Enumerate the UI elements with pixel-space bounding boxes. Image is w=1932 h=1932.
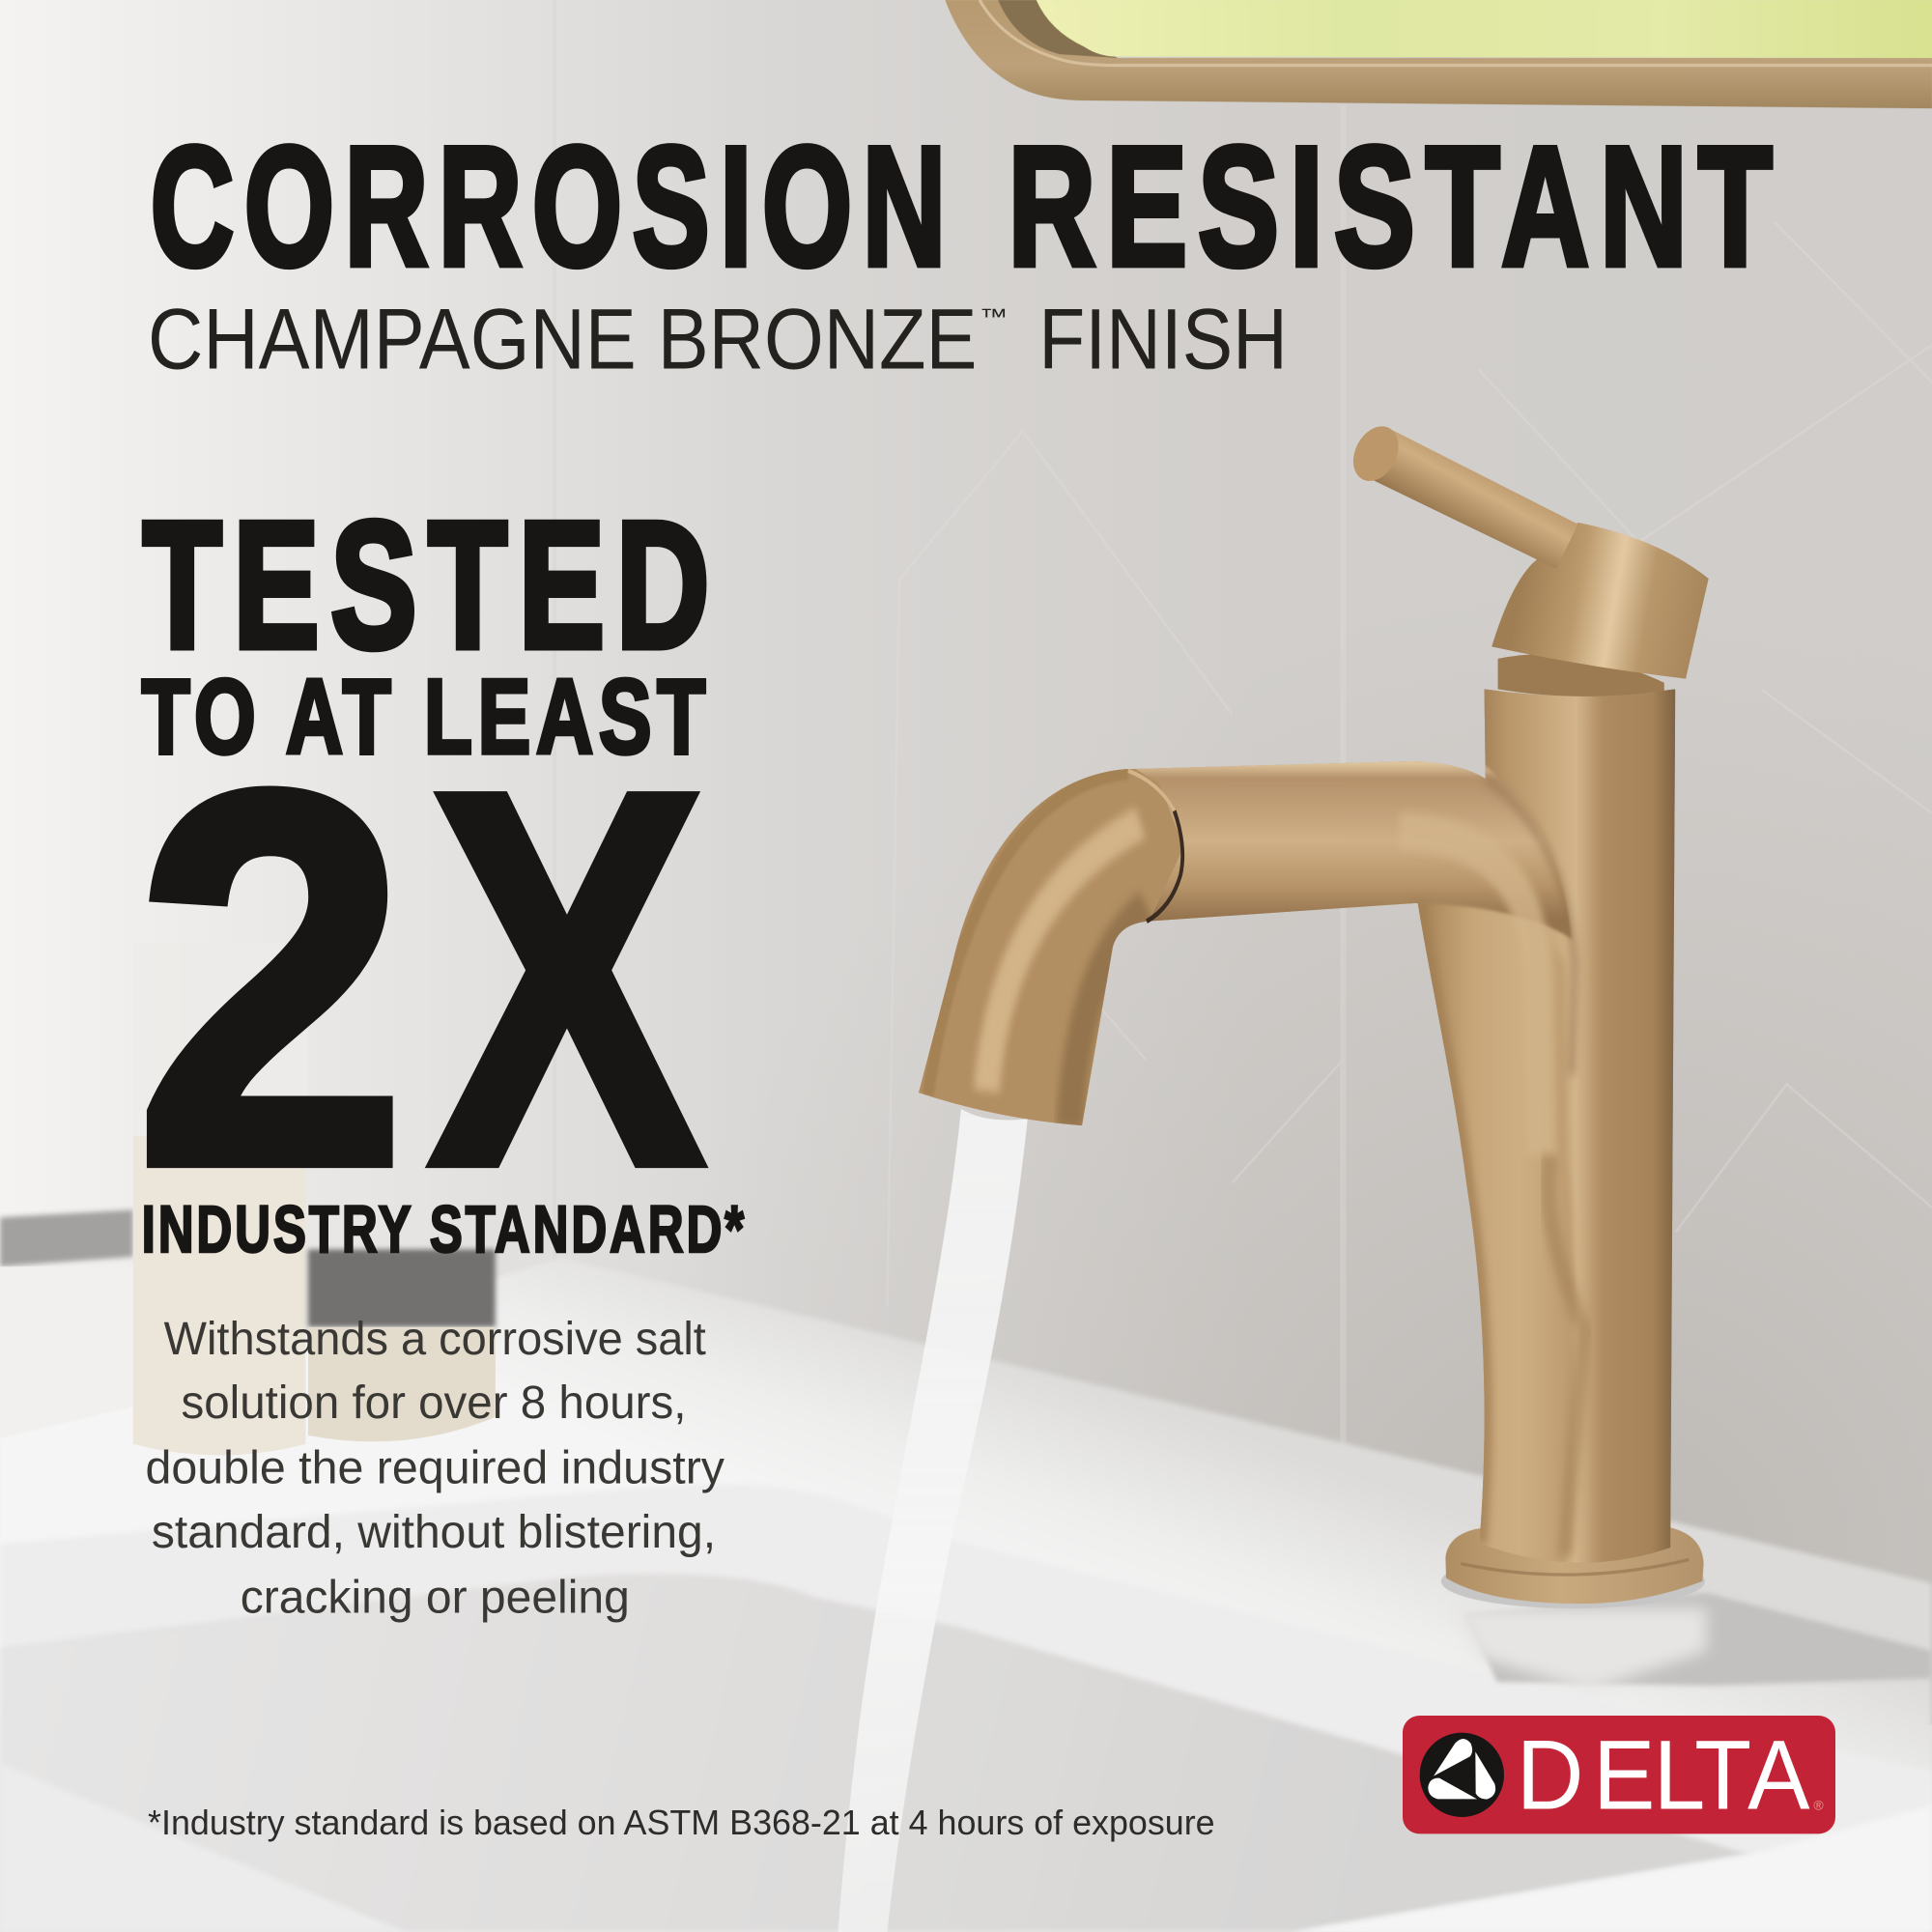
- ledge behind at left: [0, 1210, 133, 1266]
- jar body: [308, 1327, 496, 1441]
- faucet shadow on counter: [1466, 1593, 1932, 1686]
- trademark: ™: [980, 303, 1008, 328]
- logo black circle emblem: [1420, 1733, 1504, 1817]
- faucet base plate: [1441, 1527, 1705, 1608]
- blurred jar: [308, 1249, 496, 1441]
- mirror frame: [945, 0, 1932, 108]
- shoulder highlight: [1400, 831, 1541, 1155]
- elbow inner shadow: [1069, 907, 1147, 1127]
- shoulder edge: [1486, 779, 1575, 1075]
- handle lever: [1345, 415, 1577, 569]
- heading: corrosion resistant: [151, 112, 1783, 301]
- near rim at lower left: [0, 1763, 407, 1932]
- mirror glass: [1037, 0, 1932, 58]
- registered mark: ®: [1813, 1797, 1824, 1812]
- faucet lower body: [1406, 883, 1576, 1572]
- gasket: [1441, 1554, 1705, 1608]
- blurred bottle: [133, 943, 308, 1455]
- wall lower shading: [493, 493, 1932, 1725]
- elbow highlight: [986, 823, 1141, 1092]
- sink bowl: [0, 1574, 1749, 1932]
- sink rim bevel: [0, 1485, 1932, 1932]
- faucet column: [1485, 683, 1677, 1572]
- champagne bronze: CHAMPAGNE BRONZE: [148, 290, 977, 386]
- jar lid: [308, 1249, 496, 1327]
- spout ring upper: [1128, 771, 1175, 810]
- towel: [0, 1266, 133, 1438]
- bottle upper: [133, 943, 308, 1140]
- elbow outer edge: [928, 773, 1128, 1095]
- handle hub: [1492, 523, 1709, 679]
- plate: [1445, 1527, 1704, 1604]
- faucet reflection: [1454, 1608, 1707, 1690]
- plate groove: [1461, 1559, 1689, 1575]
- big claim block: [135, 485, 747, 1275]
- letter X: X: [430, 683, 705, 1275]
- brushed metal shading: [906, 683, 1677, 1572]
- tested: TESTED: [143, 485, 721, 686]
- emblem circle: [1420, 1733, 1504, 1817]
- spout elbow and outlet: [919, 769, 1180, 1126]
- body copy: cracking or peeling: [241, 1572, 630, 1624]
- body copy: double the required industry: [146, 1442, 725, 1494]
- body copy: [146, 1313, 725, 1624]
- counter top: [0, 1258, 1932, 1932]
- Delta logo: [1403, 1716, 1835, 1833]
- lower body left edge: [1418, 903, 1485, 1544]
- subheading: champagne bronze finish: [148, 290, 1288, 386]
- digit 2: 2: [135, 683, 407, 1275]
- lever end cap: [1345, 415, 1406, 493]
- neck under hub: [1498, 654, 1664, 696]
- logo wordmark: DELTA: [1517, 1720, 1810, 1831]
- tile seams and chevron pattern: [554, 0, 1932, 1466]
- right rim corner: [1293, 1805, 1932, 1932]
- footnote: *Industry standard is based on ASTM B368-21 at 4 hours of exposure: [148, 1804, 1215, 1842]
- faucet silhouette: [919, 689, 1675, 1563]
- finish: FINISH: [1038, 290, 1288, 386]
- word: corrosion: CORROSION: [151, 112, 956, 301]
- emblem teardrops: [1428, 1739, 1495, 1799]
- spout horizontal arm: [1136, 761, 1573, 939]
- 2X: [135, 683, 705, 1275]
- mirror inner channel: [998, 0, 1118, 58]
- industry standard: INDUSTRY STANDARD*: [142, 1192, 747, 1266]
- mirror: [945, 0, 1932, 108]
- lower body crease: [1548, 1155, 1584, 1555]
- body copy: solution for over 8 hours,: [182, 1377, 686, 1429]
- faucet: [906, 415, 1709, 1608]
- to at least: TO AT LEAST: [142, 658, 711, 776]
- dark ring on spout: [1147, 810, 1182, 922]
- body copy: Withstands a corrosive salt: [164, 1313, 706, 1365]
- water stream: [838, 1109, 1028, 1932]
- logo red badge: [1403, 1716, 1835, 1833]
- body copy: standard, without blistering,: [152, 1506, 716, 1558]
- frame highlight: [980, 0, 1932, 66]
- lever shaft: [1370, 431, 1577, 569]
- bottle lower: [133, 1136, 305, 1455]
